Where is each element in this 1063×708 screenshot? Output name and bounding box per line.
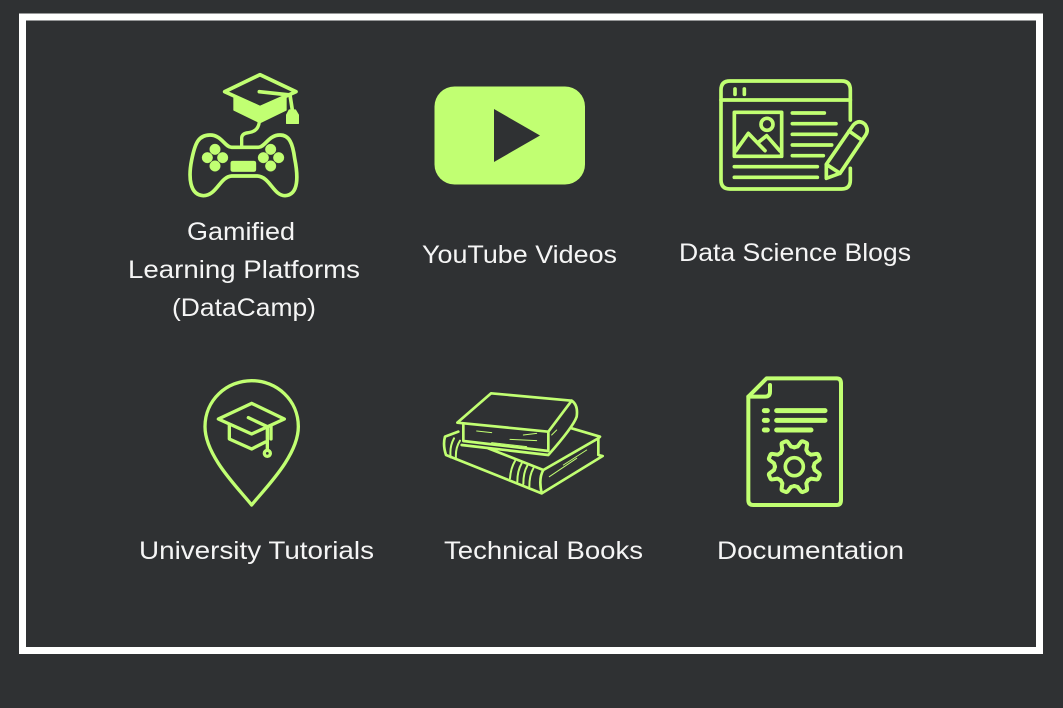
icon: blog window with pencil — [721, 81, 867, 189]
label: gamified learning platforms: Gamified — [187, 218, 295, 246]
label: youtube videos: YouTube Videos — [422, 241, 617, 269]
label: technical books: Technical Books — [444, 537, 643, 565]
icon: youtube play button — [434, 86, 585, 184]
label: gamified learning platforms — [128, 218, 360, 322]
label: gamified learning platforms: (DataCamp) — [172, 294, 316, 322]
label: university tutorials: University Tutorials — [139, 537, 374, 565]
label: gamified learning platforms: Learning Platforms — [128, 256, 360, 284]
icon: game controller with graduation cap — [190, 75, 298, 196]
label: documentation: Documentation — [717, 537, 904, 565]
icon: location pin with graduation cap — [205, 381, 298, 505]
icon: stacked books — [444, 393, 603, 493]
label: data science blogs: Data Science Blogs — [679, 239, 911, 267]
icon: document with gear — [748, 378, 841, 505]
